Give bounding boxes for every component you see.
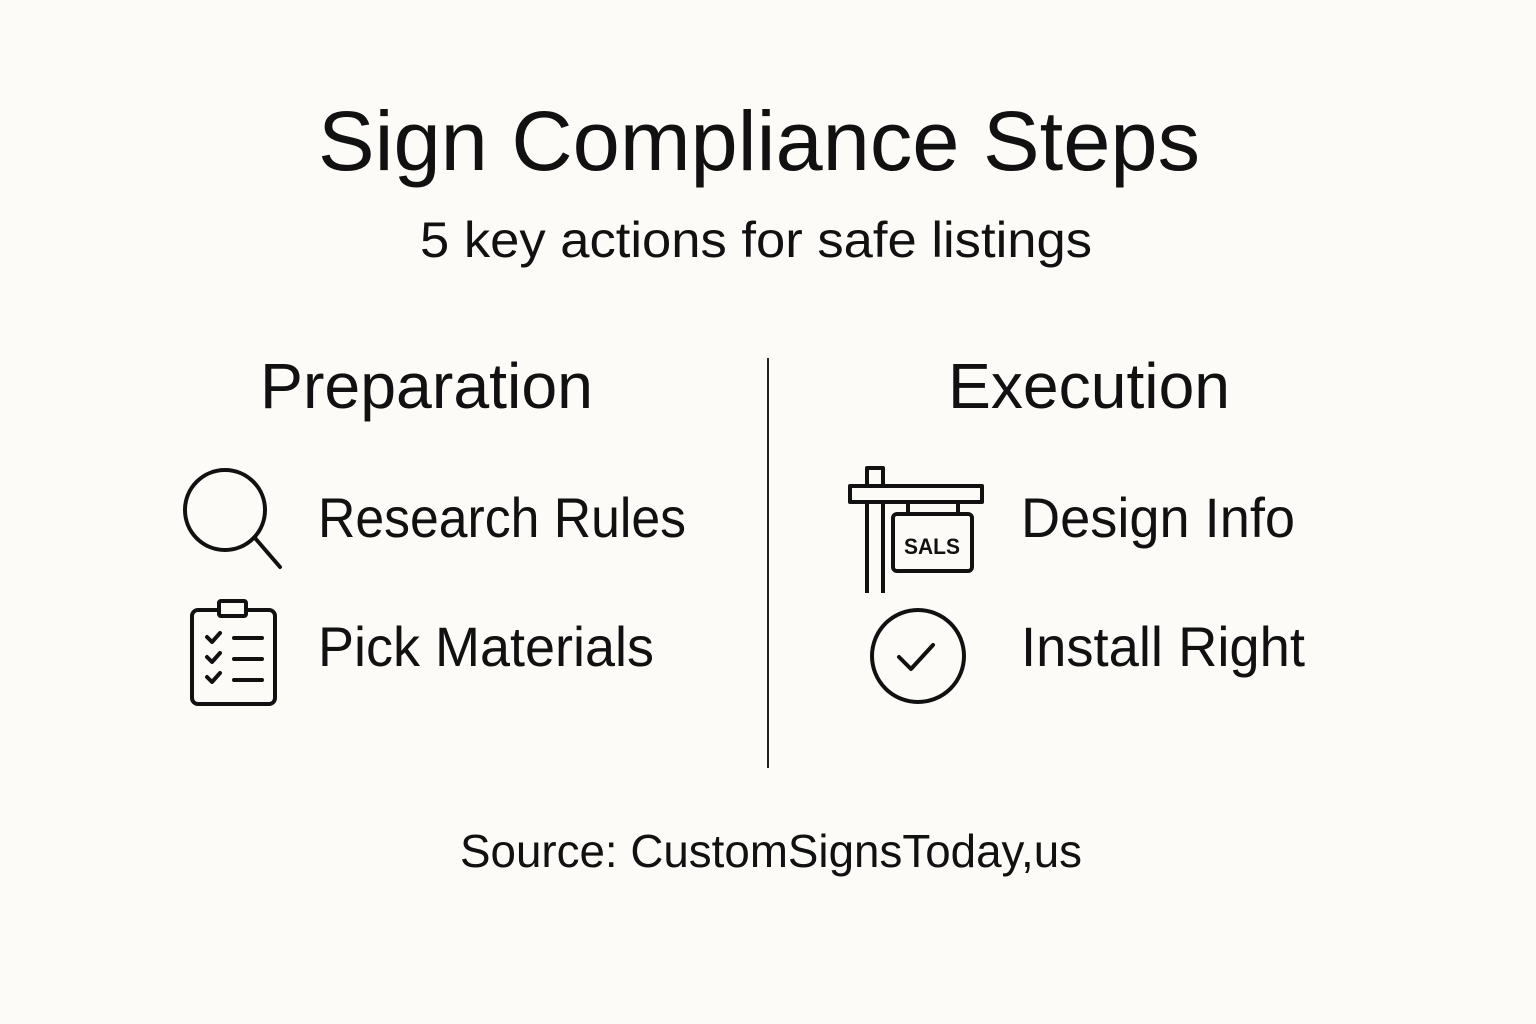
heading: Execution: Execution	[948, 350, 1230, 422]
icon: clipboard	[192, 601, 275, 704]
item: Research Rules: Research Rules	[318, 486, 686, 549]
item: Pick Materials: Pick Materials	[318, 615, 654, 678]
title: Sign Compliance Steps	[318, 94, 1200, 188]
icon: check circle	[872, 610, 964, 702]
item: Install Right: Install Right	[1021, 615, 1305, 678]
icon: sale sign	[850, 468, 982, 593]
heading: Preparation: Preparation	[260, 350, 593, 422]
item: Design Info: Design Info	[1021, 486, 1295, 549]
subtitle: 5 key actions for safe listings	[420, 212, 1092, 268]
icon: sale sign: SALS	[904, 534, 960, 559]
icon: magnifier	[185, 470, 280, 567]
source: Source: CustomSignsToday,us	[460, 825, 1082, 877]
